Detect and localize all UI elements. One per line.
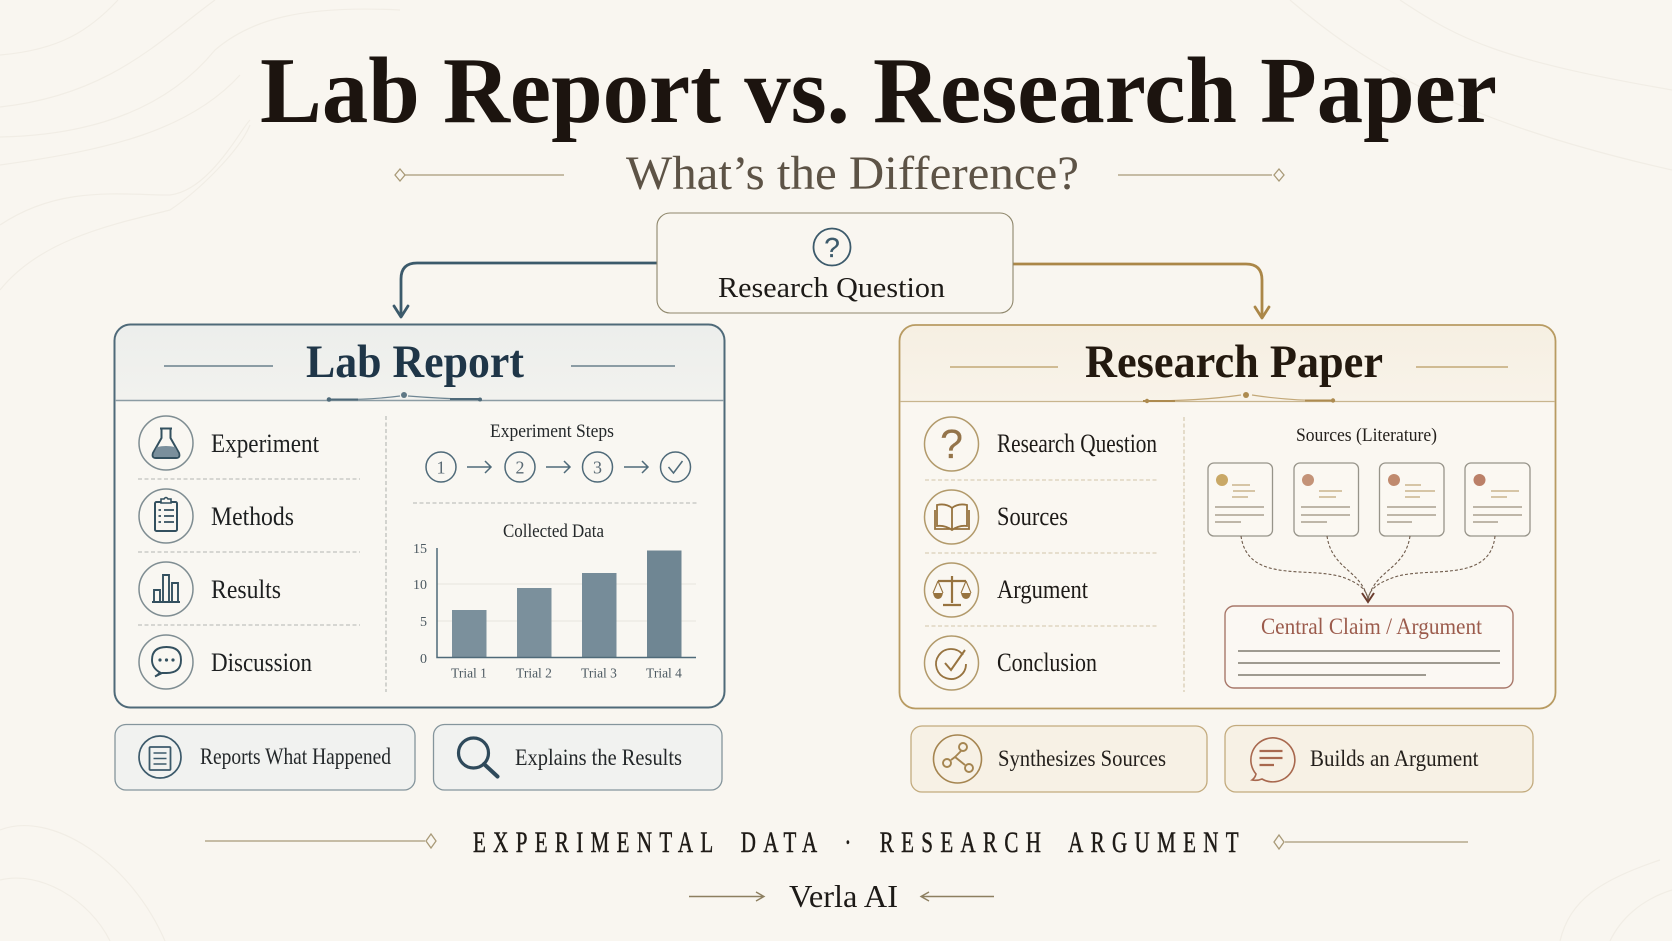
bar chart: collected data: Collected Data: [503, 522, 604, 542]
callout: explains the results: [434, 724, 722, 790]
item: methods: Methods: [211, 502, 294, 531]
bar chart: collected data: Trial 2: [516, 666, 552, 680]
item: argument: Argument: [997, 575, 1089, 604]
item: methods: [139, 489, 294, 543]
item: sources: Sources: [997, 502, 1068, 531]
bar chart: collected data: [413, 522, 696, 680]
bar chart: collected data: 15: [413, 542, 427, 557]
brand: verla ai: Verla AI: [789, 878, 898, 914]
item: discussion: Discussion: [211, 648, 312, 677]
experiment steps flow: Experiment Steps: [490, 422, 614, 442]
diagram: sources (literature): Sources (Literature): [1296, 426, 1437, 446]
brand: verla ai: [689, 878, 994, 914]
experiment steps flow: 3: [593, 458, 602, 478]
item: results: [139, 562, 281, 616]
icon: question mark: ?: [824, 232, 840, 263]
arrow: question to lab report: [394, 263, 657, 317]
experiment steps flow: 1: [436, 458, 446, 478]
item: research question: Research Question: [997, 429, 1157, 458]
callout: reports what happened: [115, 724, 415, 790]
subtitle ornaments: [395, 169, 1284, 181]
callout: synthesizes sources: Synthesizes Sources: [998, 746, 1166, 771]
source document 3: [1380, 463, 1444, 536]
heading: lab report: Lab Report: [306, 336, 524, 388]
footer tagline: EXPERIMENTAL DATA · RESEARCH ARGUMENT: [473, 826, 1246, 859]
heading: research paper: Research Paper: [1085, 336, 1383, 388]
arrowhead into claim: [1362, 593, 1374, 602]
callout: synthesizes sources: [911, 726, 1207, 792]
item: conclusion: Conclusion: [997, 648, 1097, 677]
diagram: sources (literature): [1208, 426, 1530, 602]
icon: question mark: [814, 228, 850, 266]
item: results: Results: [211, 575, 281, 604]
source document 4: [1465, 463, 1530, 536]
item: research question: ?: [940, 421, 963, 467]
bar chart: collected data: Trial 4: [646, 666, 682, 680]
heading: lab report: [164, 336, 675, 402]
panel: research question: [657, 213, 1013, 313]
bar chart: collected data: Trial 1: [451, 666, 487, 680]
source document 2: [1294, 463, 1358, 536]
callout: reports what happened: Reports What Happened: [200, 744, 391, 769]
callout: builds an argument: [1225, 726, 1533, 792]
item: experiment: [139, 416, 320, 470]
experiment steps flow: [426, 422, 690, 482]
central claim box: Central Claim / Argument: [1261, 614, 1483, 639]
heading: research paper: [950, 336, 1508, 403]
subtitle: What’s the Difference?: [626, 147, 1079, 200]
title: Lab Report vs. Research Paper: [260, 39, 1497, 143]
item: experiment: Experiment: [211, 429, 320, 458]
callout: explains the results: Explains the Results: [515, 745, 682, 770]
source document 1: [1208, 463, 1272, 536]
item: discussion: [139, 635, 312, 689]
label: research question: Research Question: [718, 272, 946, 304]
item: sources: [924, 490, 1068, 544]
bar chart: collected data: 5: [420, 615, 427, 630]
dashed connectors: [1241, 536, 1495, 600]
item: research question: [924, 417, 1157, 471]
arrow: question to research paper: [1013, 264, 1269, 318]
bar chart: collected data: Trial 3: [581, 666, 617, 680]
experiment steps flow: 2: [516, 458, 524, 478]
bar chart: collected data: 10: [413, 578, 427, 593]
panel: research paper: [900, 325, 1556, 708]
panel: lab report: [114, 324, 724, 708]
central claim box: [1225, 606, 1513, 688]
bar chart: collected data: 0: [420, 652, 427, 667]
item: conclusion: [924, 636, 1097, 690]
callout: builds an argument: Builds an Argument: [1310, 746, 1479, 771]
item: argument: [924, 563, 1089, 617]
